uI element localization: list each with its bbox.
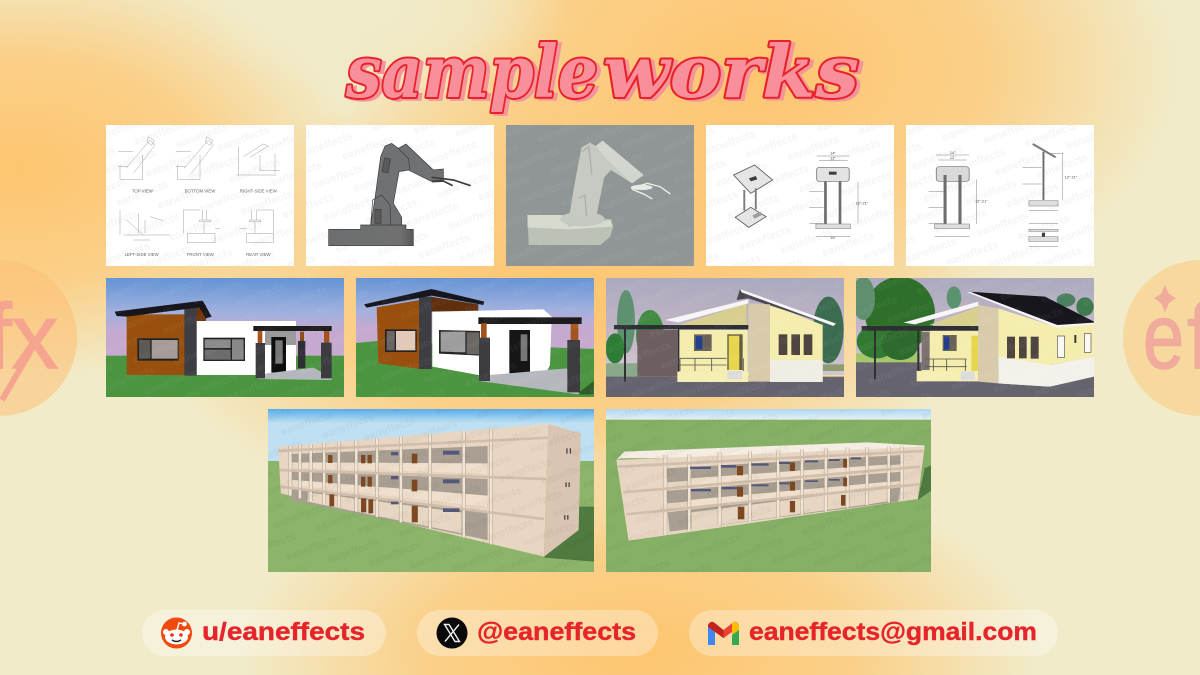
title: works: [607, 31, 863, 116]
title: [345, 29, 863, 116]
contact pill: email: [689, 610, 1058, 656]
side elevation: [1022, 144, 1063, 247]
panel: gable house front view: [600, 275, 847, 398]
trees: [600, 290, 846, 377]
email address: eaneffects@gmail.com: [749, 618, 1037, 646]
house body: [862, 292, 1094, 387]
panel: three-storey building corner view: [260, 405, 602, 574]
dimension label: 14 inch: 14": [830, 152, 837, 156]
title: works: [603, 29, 859, 114]
handle: reddit: u/eaneffects: [202, 618, 365, 646]
icon: reddit: [161, 618, 192, 648]
view label: top view: TOP VIEW: [132, 188, 154, 193]
dimension label: 12 inch: 12": [830, 157, 837, 160]
icon: x: [436, 618, 468, 648]
house body: [614, 289, 836, 382]
title: sample: [345, 29, 598, 114]
trees: [852, 277, 1094, 363]
panel: stand drawing views A: [706, 125, 894, 266]
rear elevation: [929, 155, 976, 237]
view label: rear view: REAR VIEW: [246, 252, 271, 257]
panel: gable house angled view: [852, 275, 1100, 399]
building: [278, 424, 581, 557]
view label: left-side view: LEFT-SIDE VIEW: [125, 252, 160, 257]
panel: robot arm rendered model: [506, 125, 694, 266]
front elevation: [809, 156, 858, 237]
panel: robot arm dark model: [306, 125, 494, 266]
dimension label: side height: 12"-21": [1065, 176, 1078, 180]
dimension label: base: 15": [830, 236, 837, 240]
view label: front view: FRONT VIEW: [187, 252, 215, 257]
building: [616, 442, 925, 541]
contact pill: reddit: [142, 610, 386, 656]
robot arm: [329, 143, 471, 246]
panel: modern house front view: [100, 275, 347, 399]
dimension label: 12 inch: 12": [950, 156, 956, 160]
panel: modern house angled view: [353, 275, 597, 399]
dimension label: height: 12"-21": [975, 200, 988, 204]
watermark logo circle: right: [1123, 260, 1200, 416]
panel: stand drawing views B: [906, 125, 1094, 266]
handle: x: @eaneffects: [477, 618, 636, 646]
view label: right-side view: RIGHT-SIDE VIEW: [240, 188, 278, 193]
isometric stand: [734, 165, 773, 227]
house body: [115, 301, 332, 380]
view label: bottom view: BOTTOM VIEW: [185, 188, 216, 193]
dimension label: height: 12"-21": [856, 202, 869, 206]
icon: gmail: [708, 622, 739, 645]
watermark logo circle: left: [0, 260, 77, 416]
watermark logo circle: right: e: [1143, 286, 1184, 388]
panel: three-storey building far view: [598, 405, 941, 576]
house body: [364, 289, 594, 394]
title: sample: [349, 31, 602, 116]
panel: robot arm orthographic drawings: [106, 125, 294, 266]
dimension label: 14 inch: 14": [950, 151, 956, 155]
contact pill: x: [417, 610, 658, 656]
robot arm render: [528, 141, 670, 245]
